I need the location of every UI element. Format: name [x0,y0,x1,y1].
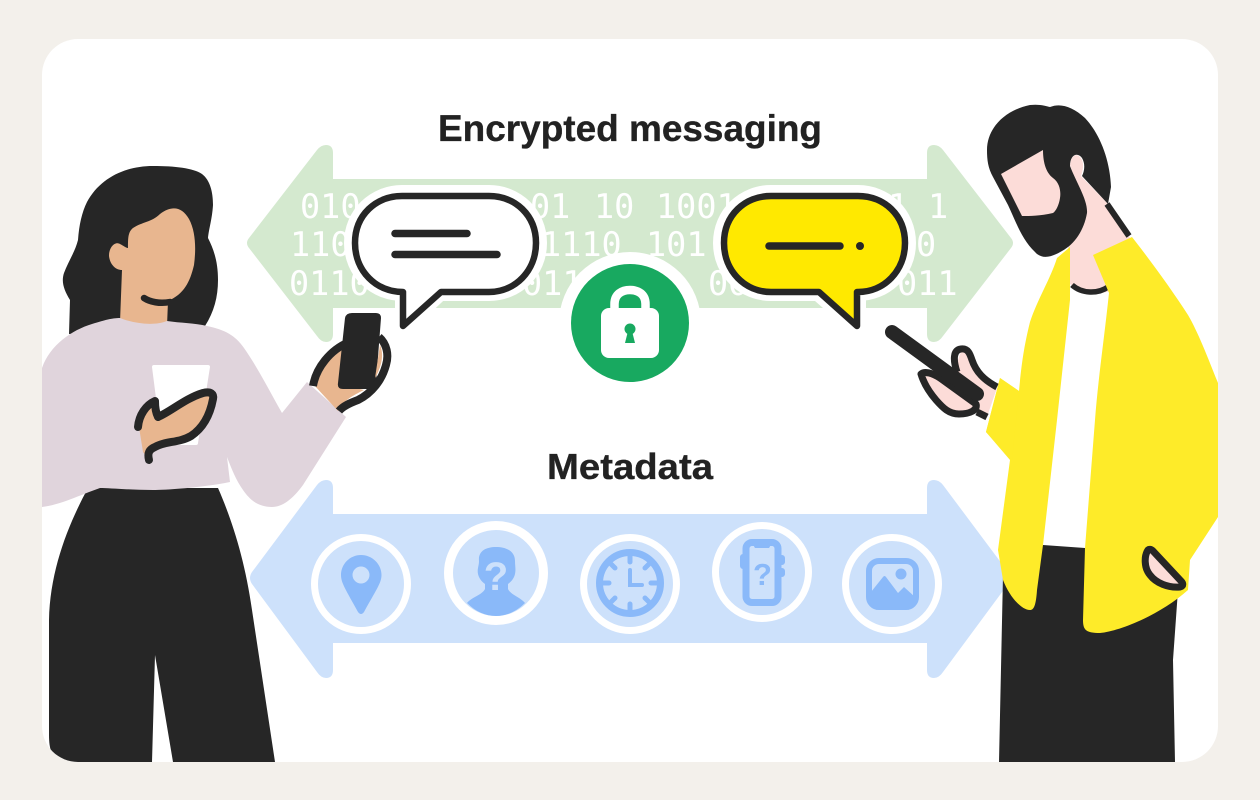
binary text row 3: 00 [708,264,748,303]
heading: Metadata: Metadata [547,446,714,487]
pants [49,488,275,762]
binary text row 2: 101 [646,225,707,264]
right hand outline [313,337,387,411]
binary text row 1: 01 [530,187,570,226]
hand in pocket [1145,549,1183,587]
left hand holding cup [140,396,210,454]
icon: unknown person: ? [484,555,508,599]
man's phone [892,332,977,394]
binary text row 2: 110 [290,225,351,264]
jacket right panel [1083,237,1218,633]
man pants [999,545,1178,762]
jacket left panel [986,247,1070,610]
yellow speech bubble [721,193,908,328]
chin line [144,298,170,303]
back of neck line [1107,204,1129,236]
thumb outline [954,349,997,417]
collar [1072,285,1108,292]
binary text row 1: 1 [888,187,908,226]
binary text row 1: 010 [300,187,361,226]
bubble halo [352,193,539,328]
icon: unknown person [448,526,544,620]
woman figure [42,166,387,762]
message lines [395,234,497,254]
man figure [892,105,1218,762]
binary text row 2: 1110 [541,225,622,264]
left hand outline [138,392,213,460]
bubble halo [721,193,908,328]
sweater [42,318,346,507]
binary text row 3: 011 [897,264,958,303]
green double arrow with binary data [247,145,1013,342]
icon: location pin [314,538,408,630]
icon: picture [846,538,938,630]
message dot [856,242,864,250]
icon: phone with question mark: ? [753,557,772,592]
hair and beard [987,105,1111,257]
icon: phone with question mark [716,526,808,618]
hair [63,166,218,334]
man's hand wrist and thumb [957,350,997,414]
binary text row 1: 10 [594,187,634,226]
bubble outline [724,196,905,326]
blue double arrow [250,480,1010,678]
binary text row 1: 1001 [656,187,737,226]
coffee cup [152,365,210,445]
icon: green padlock [559,252,701,394]
binary text row 3: 0110 [289,264,370,303]
right hand [315,350,364,411]
left jacket cuff [986,378,1019,437]
man's finger [921,373,976,414]
neck and ear [1068,155,1130,293]
face and neck [109,208,195,326]
bubble outline [355,196,536,326]
white speech bubble [352,193,539,328]
message dash [769,242,840,250]
icon: clock [584,538,676,630]
face [1001,150,1060,216]
finger [375,345,382,378]
heading: Encrypted messaging: Encrypted messaging [438,108,822,149]
phone [338,313,381,389]
binary text row 1: 1 [928,187,948,226]
binary text row 2: 0 [916,225,936,264]
binary text row 3: 011 [522,264,583,303]
